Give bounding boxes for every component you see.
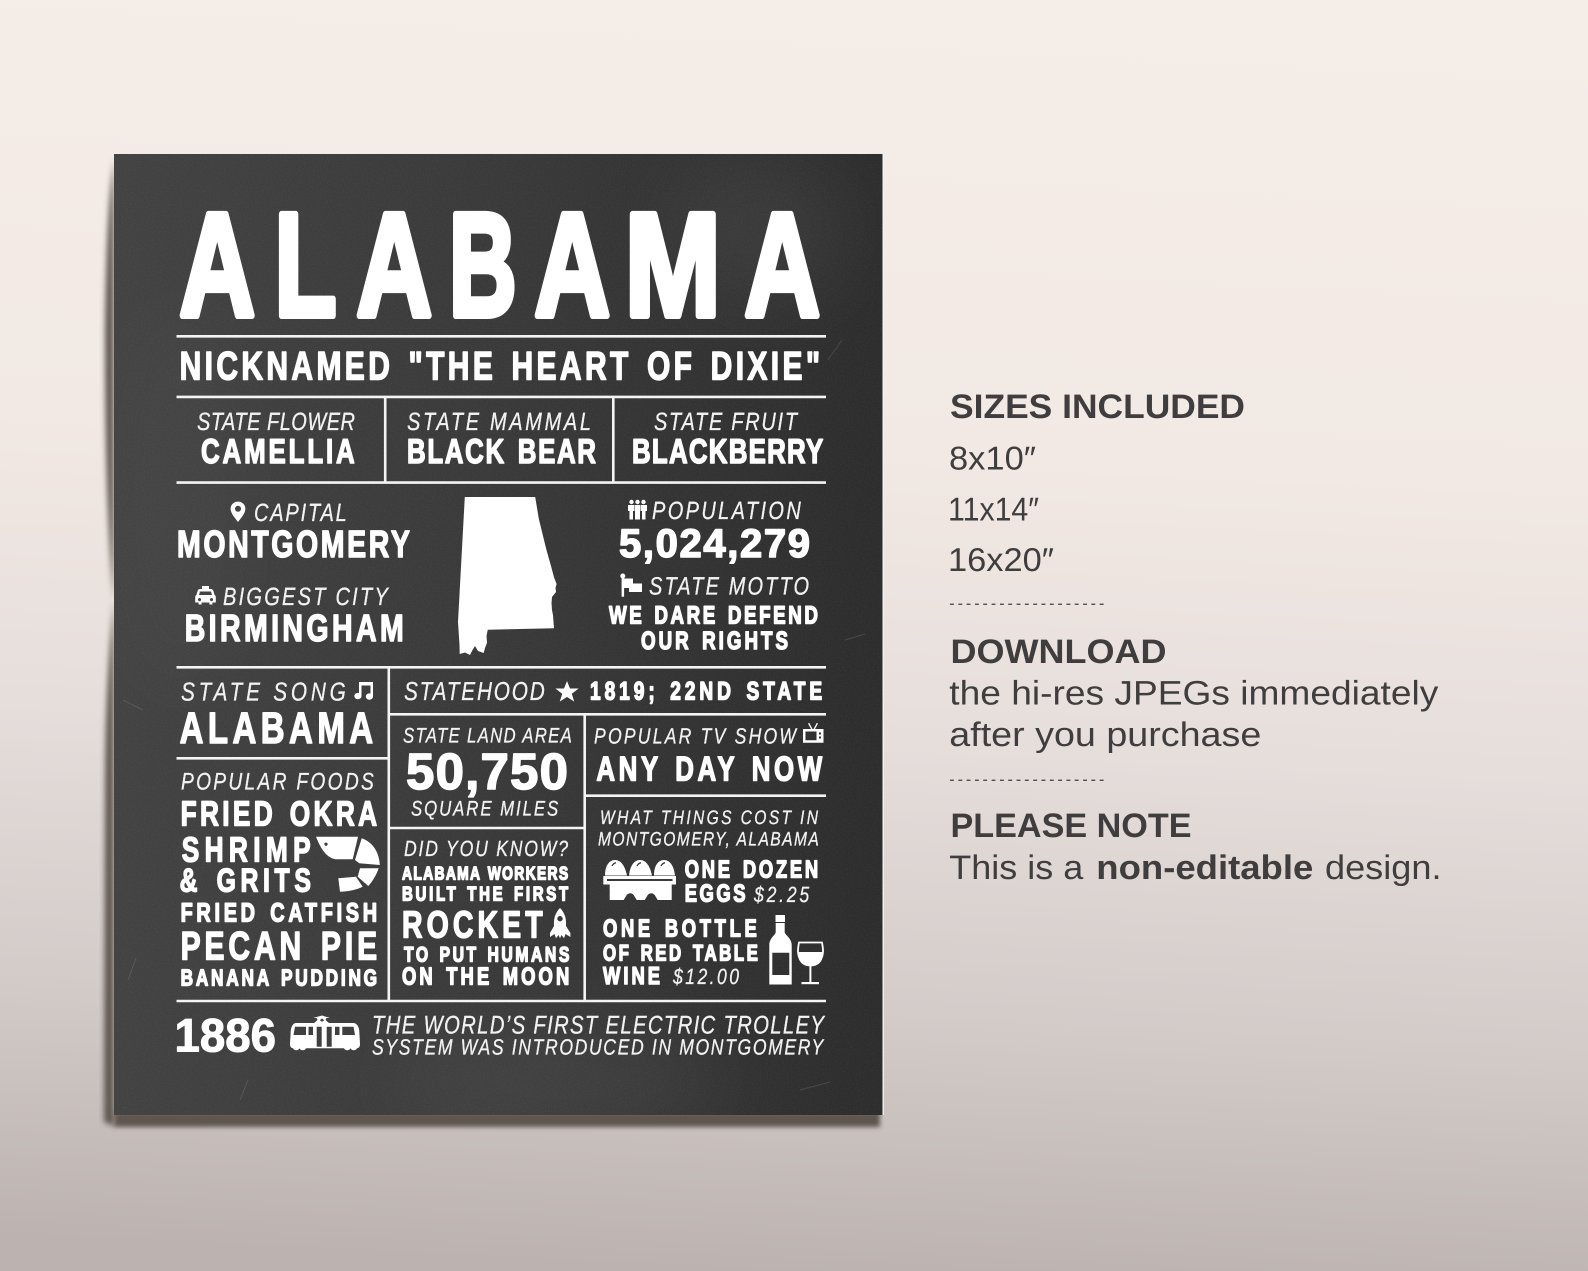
icon: television <box>803 723 824 743</box>
panel: population <box>619 497 810 566</box>
panel: popular foods: SHRIMP <box>182 830 311 869</box>
panel: capital: CAPITAL <box>254 499 347 527</box>
panel: what things cost: ONE DOZEN <box>685 856 818 883</box>
title: A <box>356 184 432 348</box>
panel: state fruit: BLACKBERRY <box>632 433 823 471</box>
panel: what things cost: OF RED TABLE <box>603 940 758 965</box>
panel: what things cost: ONE BOTTLE <box>603 915 757 942</box>
panel: statehood: 1819; 22ND STATE <box>590 678 822 706</box>
title: M <box>625 184 721 348</box>
panel: what things cost: $2.25 <box>753 882 810 907</box>
panel: capital: MONTGOMERY <box>177 524 410 566</box>
panel: popular foods: BANANA PUDDING <box>181 965 377 991</box>
panel: state flower <box>197 408 355 471</box>
text block: please note: PLEASE NOTE <box>950 807 1192 845</box>
text block: please note: This is a <box>949 849 1083 887</box>
panel: state flower: STATE FLOWER <box>197 408 355 436</box>
panel: did you know: ALABAMA WORKERS <box>402 863 568 884</box>
panel: statehood <box>404 676 822 706</box>
panel: state land area: 50,750 <box>406 743 568 800</box>
panel: did you know <box>402 836 570 991</box>
panel: trolley fact <box>174 1008 826 1061</box>
panel: state song: STATE SONG <box>181 677 346 707</box>
panel: did you know: TO PUT HUMANS <box>404 943 569 966</box>
panel: state fruit: STATE FRUIT <box>654 408 798 436</box>
panel: population: 5,024,279 <box>619 522 810 566</box>
nickname banner: NICKNAMED "THE HEART OF DIXIE" <box>180 344 820 388</box>
icon: shrimp <box>316 837 380 892</box>
panel: popular foods: POPULAR FOODS <box>181 768 374 795</box>
title: A <box>180 184 255 348</box>
icon: egg carton <box>603 860 676 900</box>
title: B <box>449 184 517 348</box>
text block: sizes included: 16x20″ <box>948 541 1054 578</box>
panel: state motto: WE DARE DEFEND <box>609 602 818 630</box>
icon: star <box>555 681 579 702</box>
icon: map pin <box>231 502 245 522</box>
panel: state song: ALABAMA <box>180 704 373 753</box>
panel: what things cost: EGGS <box>685 880 745 907</box>
product mockup scene: ------------------- <box>949 772 1104 788</box>
panel: trolley fact: SYSTEM WAS INTRODUCED IN MONTGOMERY <box>372 1034 824 1059</box>
icon: electric trolley <box>290 1016 360 1050</box>
panel: did you know: ROCKET <box>402 904 543 946</box>
panel: did you know: BUILT THE FIRST <box>402 883 568 905</box>
title: A <box>744 184 820 348</box>
icon: flag <box>620 574 642 597</box>
text block: download: after you purchase <box>949 716 1261 754</box>
poster board <box>114 154 884 1130</box>
panel: popular foods: FRIED CATFISH <box>181 897 377 927</box>
icon: wine bottle <box>769 915 792 984</box>
panel: state motto: STATE MOTTO <box>649 573 809 601</box>
panel: did you know: ON THE MOON <box>402 964 569 991</box>
text block: please note: non-editable <box>1096 849 1313 887</box>
text block: please note: design. <box>1325 849 1442 887</box>
panel: popular foods: FRIED OKRA <box>181 794 377 833</box>
panel: state mammal: STATE MAMMAL <box>407 408 591 436</box>
panel: popular tv show <box>594 723 824 788</box>
panel: state motto <box>609 573 818 655</box>
icon: music note <box>354 682 373 700</box>
panel: state land area: SQUARE MILES <box>411 798 558 821</box>
text block: sizes included: 11x14″ <box>948 490 1039 527</box>
icon: people <box>628 500 647 520</box>
poster shadow <box>104 160 880 1127</box>
panel: population: POPULATION <box>652 497 802 525</box>
panel: state land area: STATE LAND AREA <box>403 725 572 748</box>
panel: what things cost <box>598 807 823 990</box>
panel: popular foods: PECAN PIE <box>181 924 377 968</box>
icon: rocket <box>550 908 570 938</box>
panel: state motto: OUR RIGHTS <box>641 627 788 655</box>
panel: popular foods <box>180 768 380 991</box>
panel: trolley fact: 1886 <box>174 1008 276 1061</box>
panel: what things cost: MONTGOMERY, ALABAMA <box>598 829 819 851</box>
panel: biggest city <box>185 583 404 650</box>
panel: capital <box>177 499 410 566</box>
map of Alabama <box>458 497 557 655</box>
panel: state mammal <box>407 408 596 471</box>
text block: sizes included: 8x10″ <box>949 440 1036 477</box>
text block: download: the hi-res JPEGs immediately <box>949 674 1438 712</box>
panel: state flower: CAMELLIA <box>201 433 355 471</box>
panel: popular foods: & GRITS <box>180 861 311 898</box>
text block: please note <box>949 807 1442 887</box>
panel: popular tv show: POPULAR TV SHOW <box>594 723 798 748</box>
text block: sizes included: SIZES INCLUDED <box>950 388 1245 426</box>
panel: did you know: DID YOU KNOW? <box>404 836 569 861</box>
panel: state song <box>180 677 373 753</box>
text block: download <box>949 633 1438 754</box>
panel: popular tv show: ANY DAY NOW <box>596 750 822 788</box>
panel: what things cost: WINE <box>603 963 660 990</box>
icon: wine glass <box>798 942 823 984</box>
title: A <box>534 184 610 348</box>
panel: state fruit <box>632 408 823 471</box>
product mockup scene: ------------------- <box>949 596 1104 612</box>
panel: what things cost: $12.00 <box>672 964 740 989</box>
text block: sizes included <box>948 388 1245 578</box>
panel: trolley fact: THE WORLD’S FIRST ELECTRIC TROLLEY <box>372 1011 826 1039</box>
panel: biggest city: BIRMINGHAM <box>185 608 404 650</box>
title: L <box>274 184 336 348</box>
panel: statehood: STATEHOOD <box>404 676 545 706</box>
icon: taxi <box>195 586 216 604</box>
panel: what things cost: WHAT THINGS COST IN <box>600 807 819 829</box>
text block: download: DOWNLOAD <box>950 633 1166 671</box>
panel: state mammal: BLACK BEAR <box>407 433 596 471</box>
panel: state land area <box>403 725 572 821</box>
panel: biggest city: BIGGEST CITY <box>223 583 390 611</box>
